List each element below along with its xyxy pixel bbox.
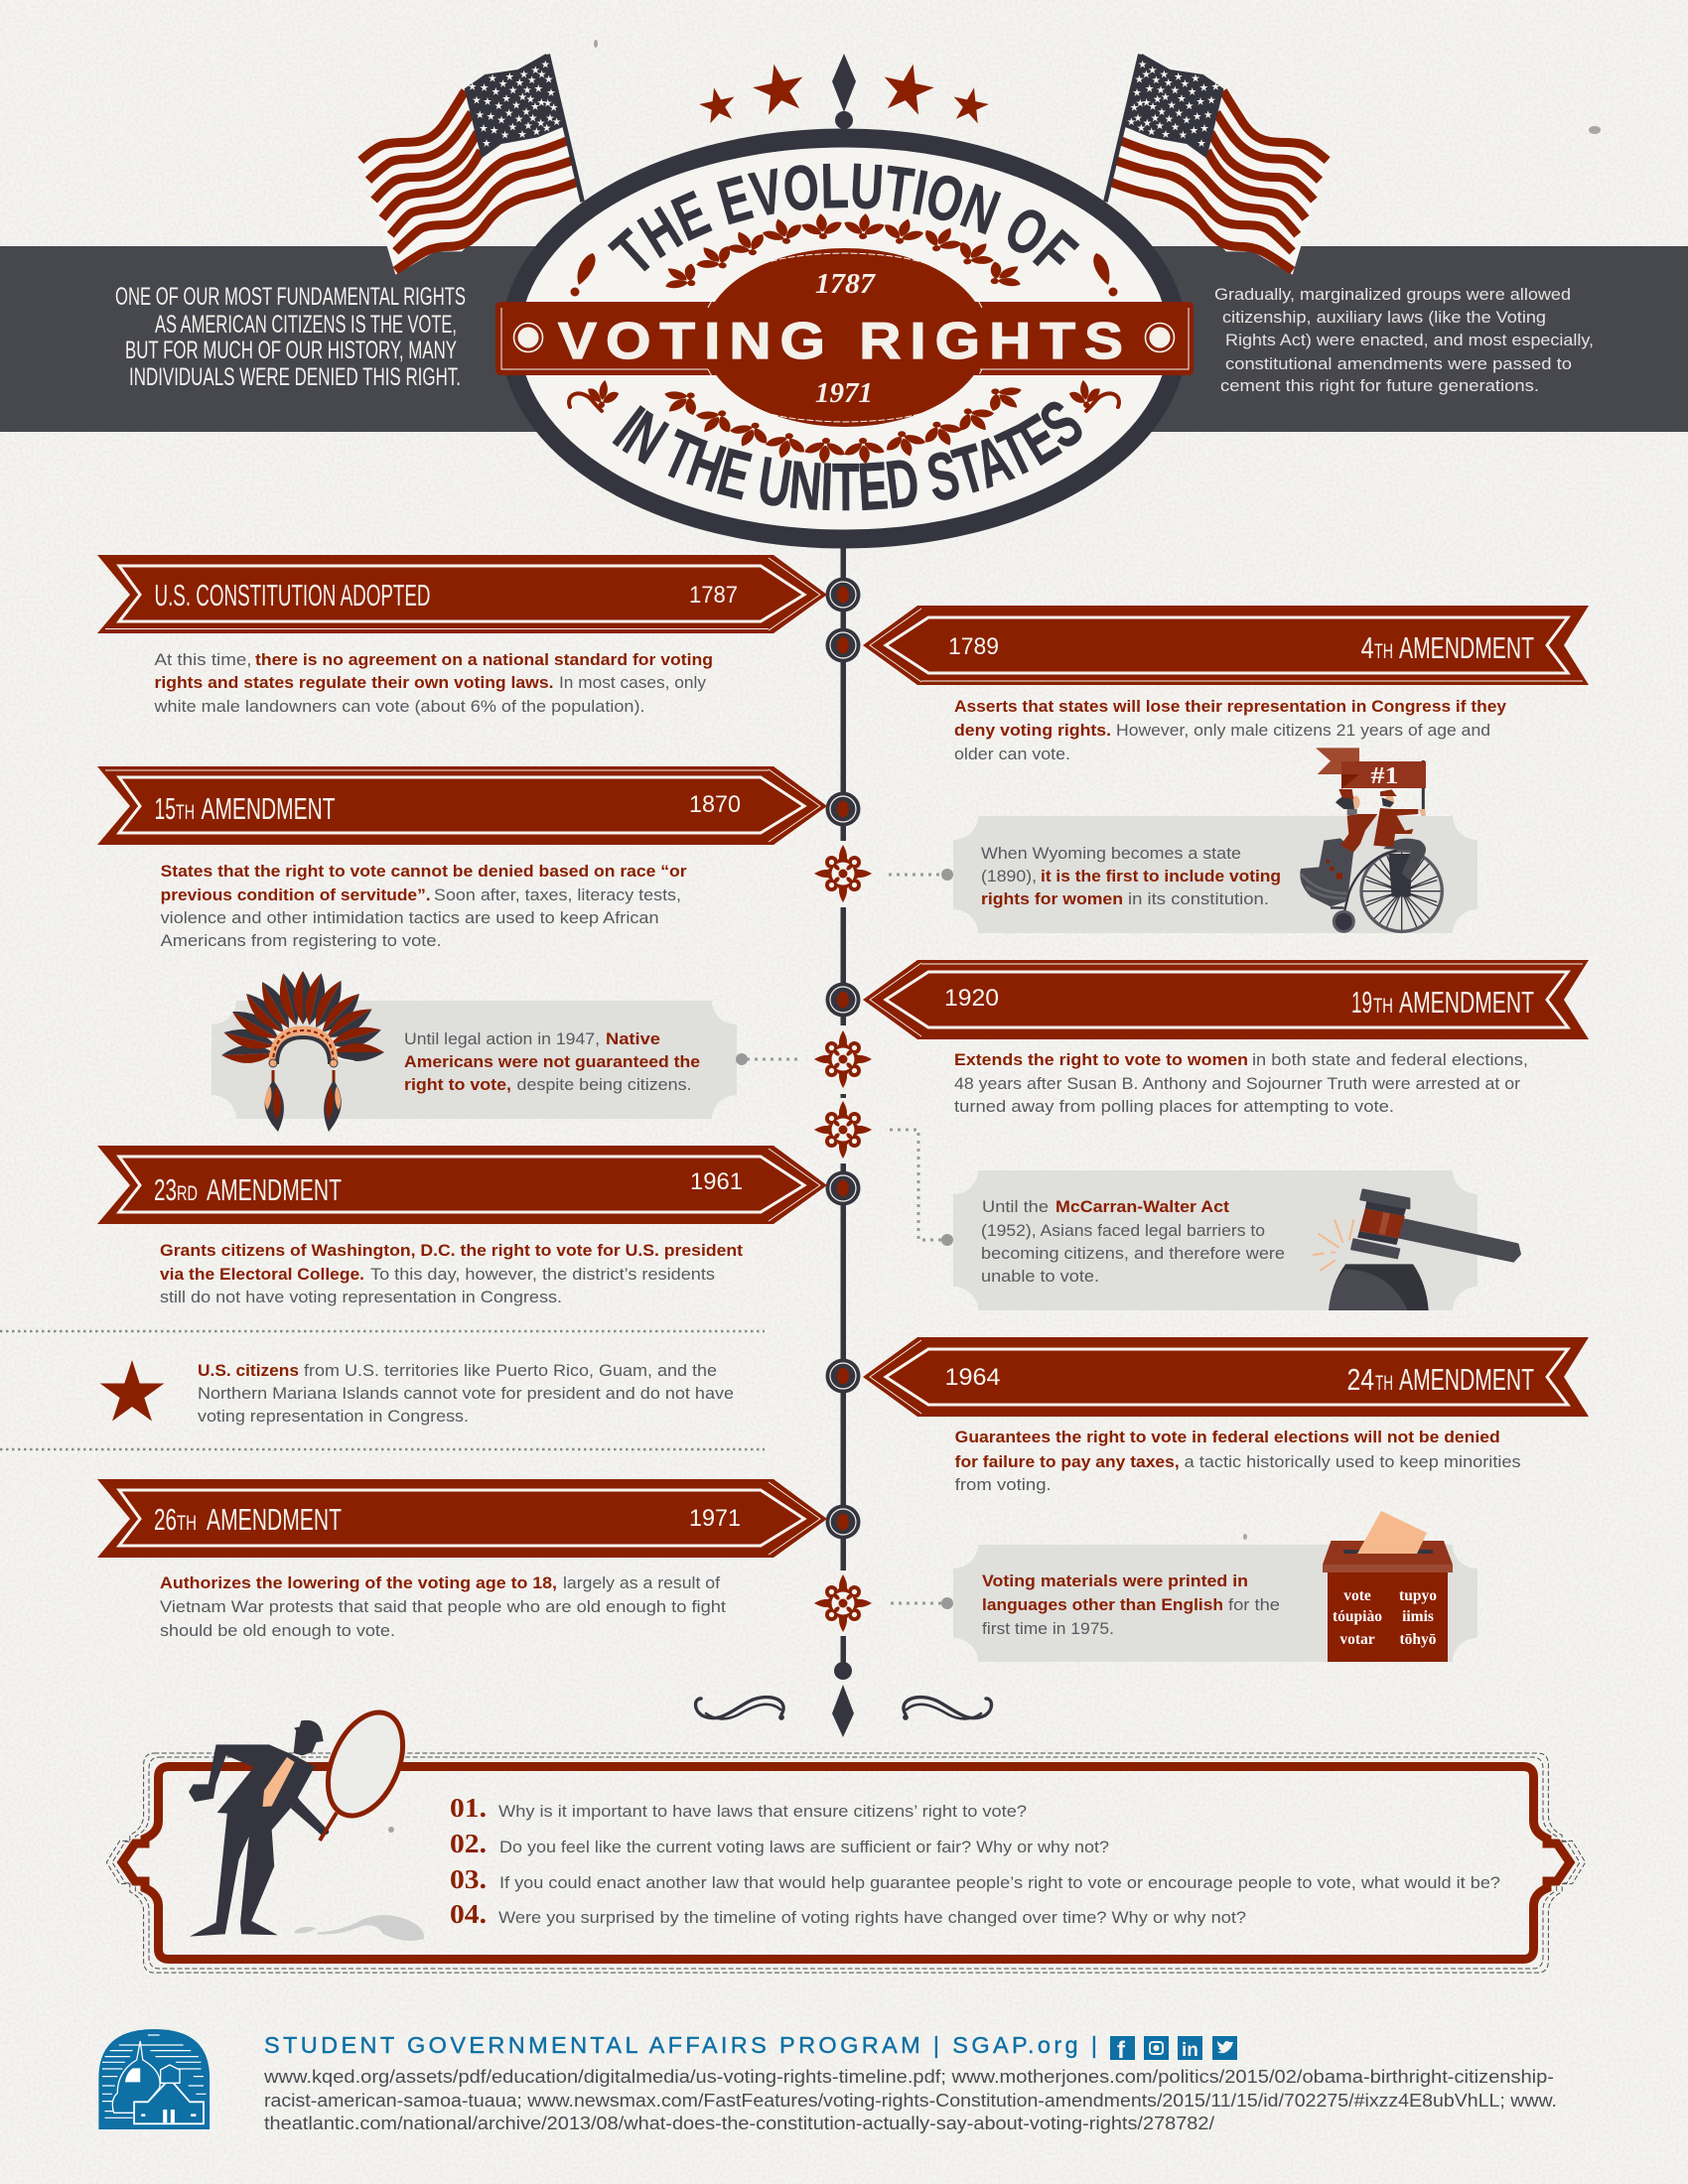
text: 23rd amendment (160, 1242, 744, 1306)
text: territories: voting representation in Congress. (198, 1408, 469, 1426)
scroll ornaments (569, 378, 1119, 411)
intro text right: cement this right for future generations. (1220, 377, 1539, 395)
social icons: f (1117, 2037, 1126, 2064)
connector dots: Wyoming (889, 869, 953, 881)
callout: languages: for the (1228, 1596, 1280, 1614)
callout: McCarran-Walter Act (953, 1170, 1477, 1310)
banner: 19th amendment (863, 960, 1589, 1039)
sources text (263, 2067, 1557, 2133)
callout: Native Americans: despite being citizens. (516, 1076, 691, 1094)
text: 26th amendment (160, 1574, 726, 1640)
text: 23rd amendment: To this day, however, the district’s residents (370, 1266, 715, 1284)
text: 19th amendment (954, 1051, 1528, 1116)
intro text right: Rights Act) were enacted, and most especially, (1225, 332, 1594, 349)
icon: couple on penny-farthing: #1 (1370, 763, 1398, 789)
text: 4th amendment (954, 698, 1507, 763)
text: 4th amendment: However, only male citizens 21 years of age and (1116, 722, 1490, 740)
years: 1971 (815, 378, 873, 409)
icon: ballot box: tupyo (1399, 1587, 1437, 1604)
text: 19th amendment: 48 years after Susan B. Anthony and Sojourner Truth were arrested at or (954, 1075, 1521, 1093)
intro text left: ONE OF OUR MOST FUNDAMENTAL RIGHTS (115, 283, 466, 311)
banner: 4th amendment: 1789 (948, 633, 999, 660)
callout: Wyoming (953, 816, 1477, 933)
text: territories: U.S. citizens (198, 1362, 299, 1380)
banner: U.S. Constitution adopted: U.S. CONSTITUTION ADOPTED (155, 578, 431, 613)
callout: Wyoming: (1890), (981, 868, 1037, 886)
banner: 19th amendment: 19 (1351, 985, 1372, 1020)
question 4: Were you surprised by the timeline of voting rights have changed over time? Why or why not? (498, 1908, 1246, 1927)
banner: 15th amendment: AMENDMENT (201, 791, 336, 826)
intro text left: AS AMERICAN CITIZENS IS THE VOTE, (155, 311, 457, 339)
icon: gavel (1313, 1189, 1520, 1310)
sources text: www.kqed.org/assets/pdf/education/digitalmedia/us-voting-rights-timeline.pdf; www.motherjones.com/politics/2015/02/obama-birthright-citizenship- (263, 2067, 1554, 2087)
callout: Wyoming: rights for women (981, 890, 1123, 908)
banner: 23rd amendment (97, 1146, 827, 1224)
callout: McCarran-Walter Act: unable to vote. (981, 1268, 1099, 1286)
question 3 (450, 1864, 1500, 1894)
sources text: theatlantic.com/national/archive/2013/08/what-does-the-constitution-actually-say-about-voting-rights/278782/ (264, 2114, 1214, 2133)
text: 19th amendment: Extends the right to vote to women (954, 1051, 1248, 1069)
floral motifs (655, 212, 1031, 465)
icon: detective with magnifying glass (189, 1701, 424, 1941)
callout: Wyoming: in its constitution. (1128, 890, 1269, 908)
intro text right: Gradually, marginalized groups were allowed (1214, 286, 1571, 304)
callout: McCarran-Walter Act: McCarran-Walter Act (1055, 1198, 1230, 1216)
question 2 (450, 1829, 1109, 1858)
banner: 26th amendment: TH (177, 1512, 197, 1535)
banner end circles (514, 324, 1174, 351)
banner: 24th amendment: 1964 (945, 1364, 1001, 1391)
exclamation ornaments (570, 253, 1118, 296)
text: 15th amendment: Americans from registering to vote. (161, 932, 442, 950)
intro text left (115, 283, 466, 391)
timeline ornaments (814, 845, 872, 1632)
banner: U.S. Constitution adopted: 1787 (689, 582, 738, 609)
question 2: Do you feel like the current voting laws are sufficient or fair? Why or why not? (499, 1838, 1109, 1856)
banner: 24th amendment: AMENDMENT (1399, 1362, 1534, 1397)
banner: 26th amendment: AMENDMENT (207, 1502, 342, 1537)
question 3: If you could enact another law that would help guarantee people’s right to vote or encourage people to vote, what would it be? (499, 1873, 1500, 1892)
text: 24th amendment: a tactic historically used to keep minorities (1185, 1453, 1521, 1471)
icon: couple on penny-farthing (1300, 748, 1442, 931)
text: constitution: At this time, (155, 651, 252, 669)
text: 15th amendment: States that the right to vote cannot be denied based on race “or (161, 863, 687, 881)
question 4: 04. (450, 1899, 487, 1929)
question 2: 02. (450, 1829, 487, 1858)
discussion questions panel (106, 1753, 1586, 1973)
text: territories: from U.S. territories like Puerto Rico, Guam, and the (304, 1362, 717, 1380)
banner: 4th amendment: AMENDMENT (1399, 630, 1534, 665)
swirl left (695, 1698, 783, 1719)
intro text right (1214, 286, 1594, 395)
banner: 23rd amendment: AMENDMENT (207, 1172, 342, 1207)
banner: 23rd amendment: 1961 (690, 1168, 743, 1195)
banner: 26th amendment: 26 (154, 1502, 177, 1537)
text: constitution: In most cases, only (559, 674, 707, 692)
callout: Wyoming: When Wyoming becomes a state (981, 845, 1241, 863)
icon: ballot box: iimis (1402, 1608, 1434, 1625)
banner: 24th amendment: 24 (1346, 1362, 1374, 1397)
callout: McCarran-Walter Act: (1952), Asians faced legal barriers to (981, 1222, 1265, 1240)
connector dots: McCarran-Walter (890, 1130, 953, 1246)
banner: 26th amendment (97, 1479, 827, 1558)
icon: star (100, 1360, 164, 1422)
text: 26th amendment: largely as a result of (563, 1574, 720, 1592)
banner: 4th amendment: TH (1374, 640, 1393, 663)
callout: Native Americans: Until legal action in 1947, (404, 1030, 600, 1048)
text: 26th amendment: Authorizes the lowering of the voting age to 18, (160, 1574, 557, 1592)
text: territories: Northern Mariana Islands cannot vote for president and do not have (198, 1385, 734, 1403)
text: 15th amendment: violence and other intimidation tactics are used to keep African (161, 909, 659, 927)
banner: 19th amendment: 1920 (944, 985, 999, 1012)
callout: McCarran-Walter Act: becoming citizens, and therefore were (981, 1245, 1285, 1263)
banner: 4th amendment: 4 (1361, 630, 1374, 665)
intro text right: constitutional amendments were passed to (1225, 355, 1572, 373)
intro text left: INDIVIDUALS WERE DENIED THIS RIGHT. (129, 363, 461, 391)
banner: 26th amendment: 1971 (689, 1505, 741, 1532)
banner: 15th amendment: 15 (155, 791, 176, 826)
social icons: in (1182, 2040, 1198, 2061)
banner: U.S. Constitution adopted (97, 555, 827, 633)
banner: 24th amendment: TH (1375, 1372, 1393, 1395)
callout: languages (953, 1545, 1477, 1662)
question 1 (450, 1793, 1027, 1823)
text: 26th amendment: Vietnam War protests that said that people who are old enough to fight (160, 1598, 726, 1616)
intro text left: BUT FOR MUCH OF OUR HISTORY, MANY (125, 337, 457, 364)
text: 26th amendment: should be old enough to vote. (160, 1622, 395, 1640)
title badge (495, 129, 1194, 548)
main title: voting rights: VOTING RIGHTS (558, 313, 1132, 370)
text: 19th amendment: turned away from polling places for attempting to vote. (954, 1098, 1394, 1116)
callout: languages: first time in 1975. (982, 1620, 1114, 1638)
banner: 19th amendment: AMENDMENT (1399, 985, 1534, 1020)
banner: 4th amendment (863, 606, 1589, 685)
text: territories (198, 1362, 734, 1426)
text: 24th amendment: for failure to pay any taxes, (955, 1453, 1180, 1471)
text: 23rd amendment: still do not have voting representation in Congress. (160, 1289, 562, 1306)
text: 24th amendment: Guarantees the right to vote in federal elections will not be denied (955, 1429, 1500, 1446)
social icons (1110, 2036, 1237, 2064)
text: constitution: rights and states regulate their own voting laws. (155, 674, 554, 692)
text: constitution: there is no agreement on a national standard for voting (255, 651, 713, 669)
icon: ballot box: tōhyō (1399, 1631, 1437, 1648)
banner: 15th amendment (97, 766, 827, 845)
sources text: racist-american-samoa-tuaua; www.newsmax.com/FastFeatures/voting-rights-Constitution-amendments/2015/11/15/id/702275/#ixzz4E8ubVhLL; www. (264, 2091, 1557, 2111)
years (815, 269, 876, 409)
intro text right: citizenship, auxiliary laws (like the Voting (1222, 309, 1546, 327)
text: 23rd amendment: via the Electoral College. (160, 1266, 364, 1284)
callout: Wyoming: it is the first to include voting (1041, 868, 1281, 886)
text: constitution: white male landowners can vote (about 6% of the population). (153, 698, 645, 716)
callout: languages: Voting materials were printed in (982, 1572, 1248, 1590)
header band (0, 246, 1688, 432)
swirl right (904, 1698, 991, 1719)
callout: Native Americans: Native (606, 1030, 660, 1048)
banner: 23rd amendment: RD (177, 1182, 198, 1205)
text: 23rd amendment: Grants citizens of Washington, D.C. the right to vote for U.S. president (160, 1242, 744, 1260)
timeline nodes (826, 578, 860, 1539)
question 3: 03. (450, 1864, 487, 1894)
icon: ballot box: tóupiào (1333, 1608, 1382, 1625)
banner: 15th amendment: TH (176, 801, 195, 824)
text: 15th amendment (161, 863, 687, 950)
years: 1787 (815, 269, 876, 300)
connector dots: languages (891, 1597, 953, 1609)
text: 24th amendment (955, 1429, 1521, 1494)
callout: McCarran-Walter Act: Until the (982, 1198, 1049, 1216)
flag left (359, 54, 584, 275)
callout: Native Americans: right to vote, (404, 1076, 511, 1094)
title arc: the evolution of: THE EVOLUTION OF (608, 163, 1080, 272)
text: 4th amendment: older can vote. (954, 746, 1070, 763)
icon: ballot box: votar (1339, 1631, 1375, 1648)
banner: 15th amendment: 1870 (689, 791, 741, 818)
logo: SGAP (98, 2029, 210, 2129)
flag right (1104, 54, 1329, 275)
text: 24th amendment: from voting. (955, 1476, 1052, 1494)
icon: feather headdress (221, 971, 384, 1132)
banner: 19th amendment: TH (1373, 995, 1393, 1018)
callout: Native Americans (211, 1001, 737, 1119)
timeline spine (832, 541, 854, 1737)
title arc: in the united states: IN THE UNITED STATES (612, 401, 1082, 510)
text: 15th amendment: previous condition of servitude”. (161, 887, 431, 904)
dotted rules around territories note (0, 1331, 765, 1449)
callout: languages: languages other than English (982, 1596, 1223, 1614)
text: 4th amendment: Asserts that states will lose their representation in Congress if they (954, 698, 1507, 716)
text: 19th amendment: in both state and federal elections, (1252, 1051, 1528, 1069)
text: 4th amendment: deny voting rights. (954, 722, 1111, 740)
stars and finial (696, 54, 992, 129)
banner: 23rd amendment: 23 (154, 1172, 177, 1207)
icon: ballot box: vote (1343, 1587, 1371, 1604)
question 1: 01. (450, 1793, 487, 1823)
text: constitution (153, 651, 713, 716)
connector dots: Native Americans (736, 1053, 797, 1065)
banner: 24th amendment (863, 1337, 1589, 1417)
footer heading: STUDENT GOVERNMENTAL AFFAIRS PROGRAM | SGAP.org | (264, 2032, 1097, 2058)
question 4 (450, 1899, 1246, 1929)
icon: ballot box (1323, 1511, 1453, 1662)
question 1: Why is it important to have laws that ensure citizens’ right to vote? (498, 1802, 1027, 1821)
text: 15th amendment: Soon after, taxes, literacy tests, (434, 887, 681, 904)
callout: Native Americans: Americans were not guaranteed the (404, 1053, 700, 1071)
